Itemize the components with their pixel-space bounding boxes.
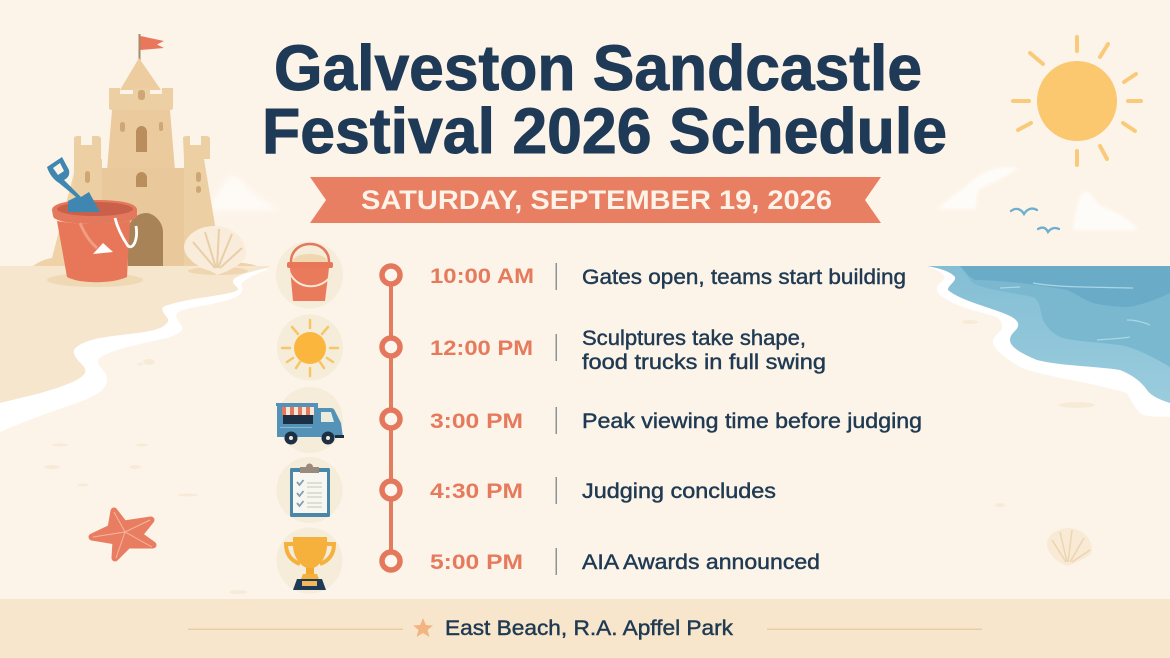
bucket rim outer <box>52 200 137 224</box>
left shoreline foam <box>0 268 267 432</box>
description: Gates open, teams start building <box>582 266 906 289</box>
tower window <box>136 126 147 152</box>
title line 2: Festival 2026 Schedule <box>262 95 947 167</box>
ocean foam <box>927 266 1170 417</box>
timeline node <box>382 338 400 356</box>
schedule row: 5:00 PM <box>276 528 820 594</box>
bucket with shovel <box>47 157 143 287</box>
wave highlights <box>1000 283 1150 340</box>
time: 10:00 AM <box>430 265 534 288</box>
time: 5:00 PM <box>430 551 523 574</box>
clouds right <box>937 167 1138 230</box>
handle patch <box>93 243 113 254</box>
schedule row: 10:00 AM <box>276 242 906 308</box>
timeline node <box>382 266 400 284</box>
schedule row: 3:00 PM <box>276 387 922 453</box>
cloud behind castle <box>208 175 280 210</box>
shovel <box>47 157 100 212</box>
castle door <box>128 213 163 266</box>
time: 12:00 PM <box>430 337 533 360</box>
timeline node <box>382 481 400 499</box>
title <box>262 32 947 167</box>
ocean water <box>927 266 1170 403</box>
description: food trucks in full swing <box>582 351 826 374</box>
wet sand area <box>0 266 270 403</box>
bucket handle <box>115 218 137 247</box>
timeline line <box>389 275 393 561</box>
left tower <box>74 136 102 200</box>
footer band <box>0 599 1170 658</box>
left seashell <box>184 226 248 275</box>
icon: star <box>413 618 433 637</box>
schedule row: 4:30 PM <box>276 457 776 523</box>
right tower <box>183 136 218 266</box>
sand speckles <box>44 320 1095 594</box>
inner handle <box>80 223 97 248</box>
spire <box>120 58 161 90</box>
icon: sun <box>277 314 343 380</box>
description <box>582 327 826 374</box>
tower crown <box>109 88 173 110</box>
starfish <box>92 511 153 558</box>
time: 4:30 PM <box>430 480 523 503</box>
mid water <box>960 266 1170 367</box>
timeline node <box>382 552 400 570</box>
main tower <box>107 110 175 170</box>
date text: SATURDAY, SEPTEMBER 19, 2026 <box>361 185 832 215</box>
right seashell <box>1047 528 1092 566</box>
description: Sculptures take shape, <box>582 327 806 350</box>
sun <box>1013 37 1141 165</box>
icon: clipboard <box>276 457 342 523</box>
deep water <box>960 266 1170 307</box>
schedule row: 12:00 PM <box>277 314 826 380</box>
description: AIA Awards announced <box>582 551 820 574</box>
bucket inside <box>57 202 133 216</box>
birds <box>1011 209 1059 232</box>
bucket body <box>57 221 130 282</box>
description: Judging concludes <box>582 480 776 503</box>
wall window <box>136 172 147 187</box>
location: East Beach, R.A. Apffel Park <box>445 617 734 640</box>
sandcastle <box>33 34 257 266</box>
time: 3:00 PM <box>430 410 523 433</box>
castle wall <box>102 168 184 266</box>
timeline node <box>382 410 400 428</box>
bucket shadow <box>47 273 143 287</box>
title line 1: Galveston Sandcastle <box>274 32 922 104</box>
icon: bucket <box>276 242 343 308</box>
icon: food truck <box>276 387 344 453</box>
flag <box>138 34 164 60</box>
small windows <box>85 90 201 193</box>
icon: trophy <box>276 528 342 594</box>
castle base mound <box>33 173 257 266</box>
date banner <box>310 177 881 223</box>
description: Peak viewing time before judging <box>582 410 922 433</box>
